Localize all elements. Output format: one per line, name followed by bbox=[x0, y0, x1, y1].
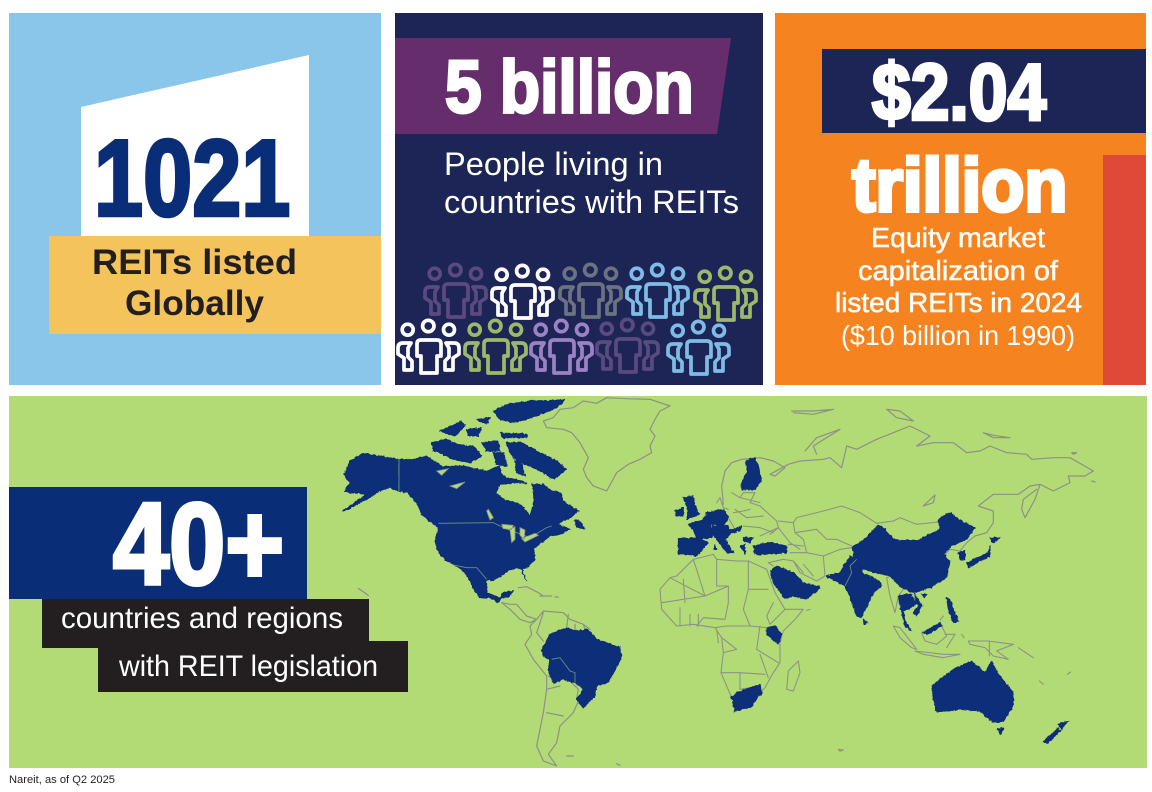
REIT countries: Oceania bbox=[932, 661, 1068, 744]
description: equity market capitalization: capitalization of bbox=[858, 255, 1058, 286]
map: Europe, Africa, Asia, Oceania bbox=[660, 409, 1095, 751]
panel: 5 billion people bbox=[395, 13, 763, 385]
description: equity market capitalization: ($10 billion in 1990) bbox=[841, 320, 1075, 351]
icon: white building shape bbox=[81, 55, 309, 236]
label: countries and regions: countries and regions bbox=[61, 602, 343, 635]
panel: REITs listed globally bbox=[9, 13, 381, 385]
Greenland outline bbox=[543, 398, 670, 491]
description: equity market capitalization bbox=[835, 222, 1082, 351]
navy heading band bbox=[822, 49, 1146, 133]
red side bar bbox=[1103, 155, 1146, 385]
Internal borders bbox=[399, 459, 552, 579]
panel: world map bbox=[9, 396, 1147, 768]
Central America, Caribbean and South America outlines bbox=[358, 587, 620, 766]
number: 40+: 40+ bbox=[113, 481, 284, 610]
Arctic islands bbox=[432, 400, 567, 479]
description: equity market capitalization: listed REITs in 2024 bbox=[835, 287, 1082, 318]
description: equity market capitalization: Equity market bbox=[871, 222, 1045, 253]
yellow label band bbox=[49, 236, 381, 334]
REIT countries: Middle East and South Asia bbox=[770, 556, 882, 624]
country boundary highlights bbox=[700, 514, 880, 586]
Africa outline and borders bbox=[660, 554, 803, 698]
description: people living in countries with REITs: countries with REITs bbox=[444, 184, 739, 220]
map: Americas bbox=[343, 398, 670, 766]
number: 5 billion: 5 billion bbox=[445, 46, 694, 128]
icons: groups of people bbox=[398, 264, 756, 374]
number: 1021: 1021 bbox=[94, 118, 290, 240]
label: REITs listed Globally: REITs listed bbox=[92, 243, 297, 282]
REIT countries: Europe bbox=[675, 458, 787, 556]
REIT countries: East and Southeast Asia bbox=[852, 512, 1000, 634]
number: $2.04: $2.04 bbox=[872, 47, 1046, 137]
REIT countries: Africa bbox=[732, 626, 782, 711]
label: countries and regions bbox=[42, 599, 408, 692]
Eurasia outline bbox=[722, 409, 1095, 536]
Europe and Asia borders bbox=[717, 493, 1071, 751]
number unit: trillion: trillion bbox=[852, 144, 1067, 227]
description: people living in countries with REITs: People living in bbox=[444, 146, 663, 182]
Brazil bbox=[542, 628, 622, 708]
label: REITs listed Globally bbox=[92, 243, 297, 323]
panel: equity market capitalization bbox=[775, 13, 1146, 385]
purple heading band bbox=[395, 38, 731, 134]
Newfoundland bbox=[575, 519, 585, 529]
label: countries and regions: with REIT legislation bbox=[118, 650, 378, 683]
footnote: source: Nareit, as of Q2 2025 bbox=[9, 774, 115, 786]
label: REITs listed Globally: Globally bbox=[125, 284, 265, 323]
Alaska, Canada, USA, Mexico bbox=[343, 453, 398, 511]
description: people living in countries with REITs bbox=[444, 146, 739, 220]
Great Lakes and northern lakes bbox=[437, 469, 538, 543]
heading band: 40+ bbox=[9, 487, 307, 599]
